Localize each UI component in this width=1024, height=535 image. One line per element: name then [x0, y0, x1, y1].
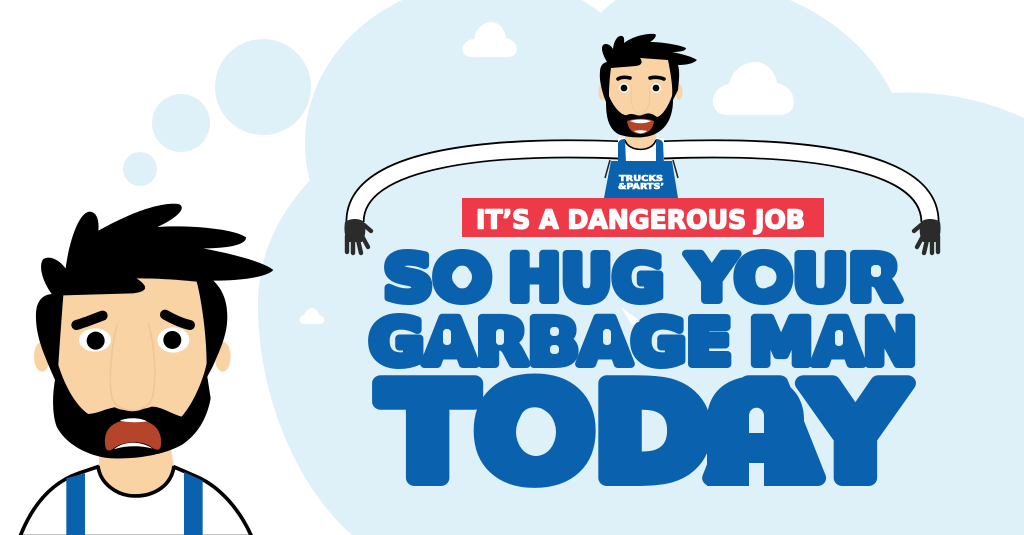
red banner [462, 198, 824, 237]
bib strokes [605, 160, 678, 178]
banner text: IT’S A DANGEROUS JOB [476, 206, 805, 236]
eyebrows [618, 77, 664, 79]
right arm [658, 149, 930, 222]
mouth [627, 119, 654, 134]
white clouds [300, 22, 977, 324]
pupils [87, 331, 181, 350]
blocky fill for the A of TODAY [707, 376, 804, 486]
left hand [344, 219, 371, 253]
small happy man [598, 34, 697, 198]
collar line [98, 466, 174, 496]
truck parts logo second line: &PARTS’ [618, 182, 664, 191]
suspenders [66, 472, 203, 535]
headline line two: MAN [749, 306, 917, 379]
large worried man [20, 204, 273, 535]
truck parts logo: TRUCKS [619, 174, 663, 183]
mouth [105, 419, 161, 450]
headline line one: HUG [508, 242, 664, 315]
headline line two [369, 306, 917, 379]
face [58, 278, 207, 417]
ears [34, 342, 231, 372]
eyes [619, 83, 661, 93]
thought bubbles [123, 39, 311, 186]
nose [631, 85, 650, 114]
overall straps [618, 139, 664, 164]
collar line [625, 140, 656, 149]
face [609, 58, 672, 117]
headline line three: TODAY [380, 357, 908, 509]
teeth [630, 120, 651, 133]
letter counters [443, 265, 881, 488]
background cloud [258, 0, 1024, 535]
headline line two: GARBAGE [369, 306, 732, 379]
ears [598, 84, 682, 100]
nose [110, 323, 155, 410]
teeth [114, 418, 153, 449]
t-shirt [20, 467, 252, 535]
headline line one [384, 242, 901, 315]
overall bib [604, 161, 678, 198]
shirt [618, 138, 664, 168]
white speck between headline lines [621, 307, 640, 325]
headline [369, 242, 917, 509]
right hand [914, 219, 941, 253]
neck [625, 130, 656, 149]
hair and beard [36, 204, 273, 458]
hair and beard [600, 34, 697, 137]
eye whites [79, 327, 189, 353]
headline line one: YOUR [686, 242, 901, 315]
neck [99, 443, 174, 496]
eyebrows [76, 315, 190, 325]
left arm [355, 149, 624, 222]
headline line one: SO [384, 242, 492, 315]
